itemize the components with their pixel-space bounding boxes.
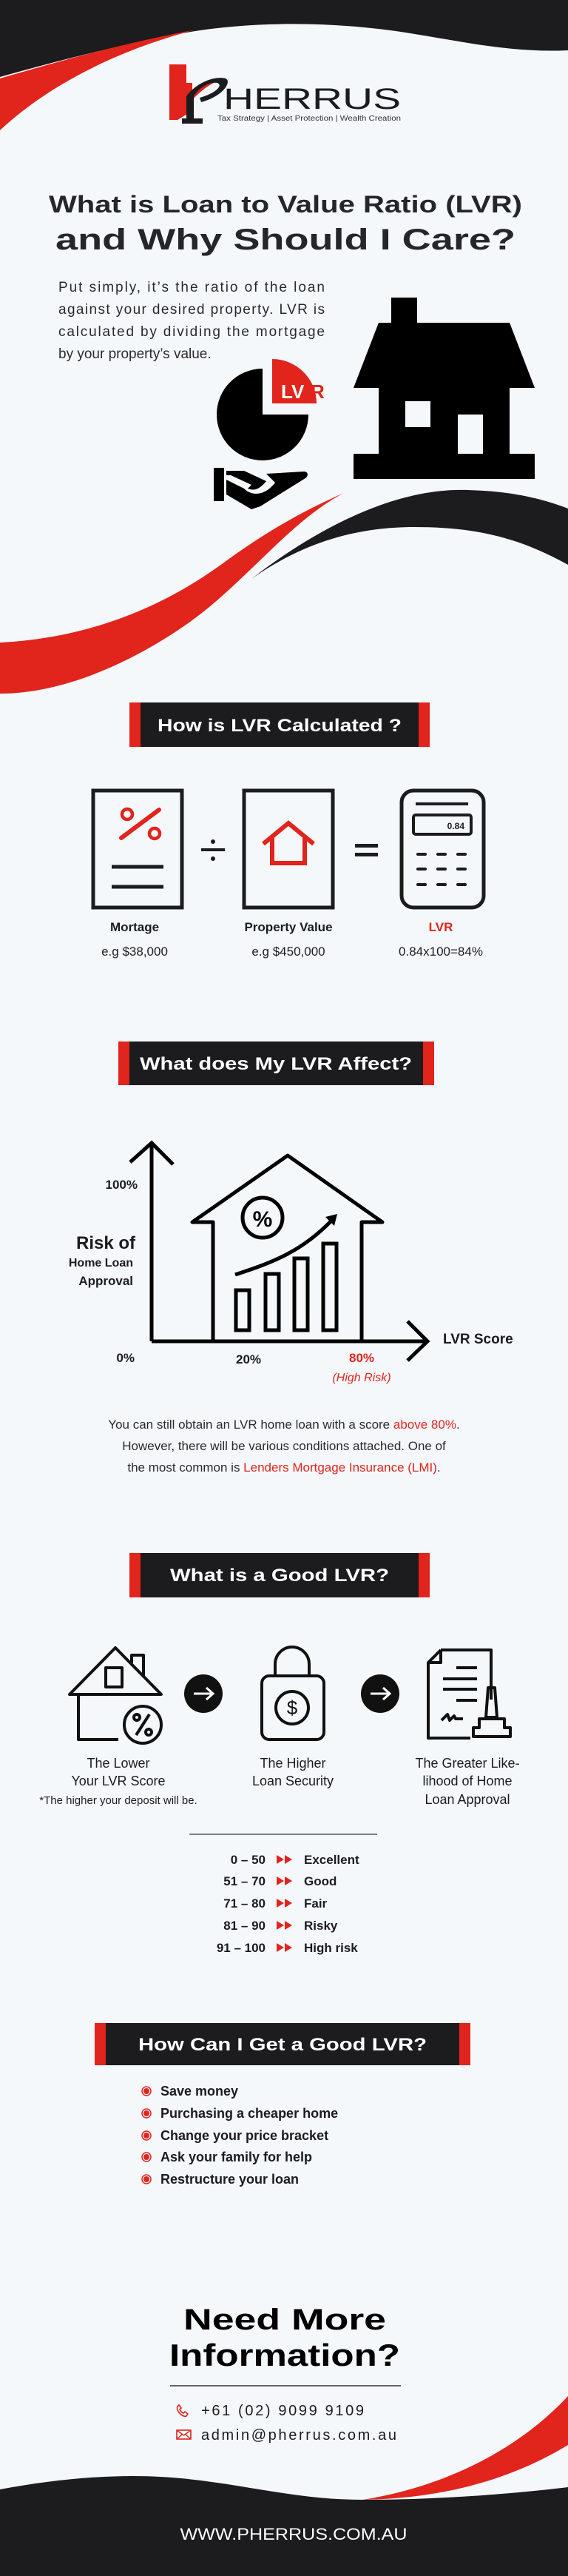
icon: document with stamp	[428, 1650, 510, 1738]
LMI paragraph: However, there will be various conditions attached. One of	[122, 1439, 446, 1453]
calc: property icon	[244, 791, 333, 908]
intro paragraph: calculated by dividing the mortgage	[58, 324, 325, 340]
LVR rating scale: Risky	[304, 1919, 338, 1933]
LVR rating scale: 81 – 90	[223, 1919, 266, 1933]
logo: HERRUS	[223, 83, 401, 115]
divide sign	[201, 839, 225, 861]
arrow 1	[184, 1674, 223, 1713]
arrow 2	[361, 1674, 399, 1713]
footer url: WWW.PHERRUS.COM.AU	[180, 2525, 407, 2543]
logo: Tax Strategy | Asset Protection | Wealth Creation	[217, 115, 401, 123]
calculator icon: 0.84	[447, 821, 464, 831]
calc labels	[101, 920, 483, 959]
good LVR captions: Your LVR Score	[71, 1774, 166, 1788]
LVR rating scale: 91 – 100	[217, 1941, 266, 1955]
calc labels: LVR	[429, 920, 453, 934]
chart: risk vs LVR: 20%	[236, 1352, 261, 1366]
header: What is a Good LVR: What is a Good LVR?	[170, 1566, 389, 1586]
good LVR captions: Loan Approval	[425, 1792, 510, 1807]
calc labels: Mortage	[110, 920, 159, 934]
contact details: +61 (02) 9099 9109	[201, 2403, 364, 2419]
hero bottom wave red	[0, 493, 344, 694]
calc labels: e.g $38,000	[101, 945, 168, 959]
intro paragraph: against your desired property. LVR is	[58, 302, 325, 318]
icon: LVR pie and hand: R	[311, 380, 325, 403]
title: What is Loan to Value Ratio (LVR)	[49, 191, 522, 218]
title	[49, 191, 522, 256]
need more information: Need More	[183, 2304, 386, 2336]
icon: LVR pie and hand	[214, 359, 325, 509]
good LVR captions: The Higher	[260, 1756, 326, 1771]
tips list: Save money	[160, 2084, 238, 2099]
top wave black	[0, 0, 568, 77]
calculator icon	[402, 791, 484, 908]
tips list: Ask your family for help	[160, 2150, 312, 2164]
good LVR captions	[39, 1756, 520, 1807]
calc labels: e.g $450,000	[251, 945, 325, 959]
header: What does My LVR Affect	[118, 1042, 434, 1085]
header: How Can I Get a Good LVR	[95, 2023, 470, 2065]
good LVR captions: Loan Security	[252, 1774, 334, 1788]
good LVR captions: The Greater Like-	[415, 1756, 520, 1771]
equals sign	[355, 844, 378, 856]
icon: house with percent	[70, 1648, 161, 1743]
LVR rating scale: 51 – 70	[223, 1874, 266, 1888]
chart: risk vs LVR: 80%	[349, 1351, 374, 1365]
icon: LVR pie and hand: LV	[281, 380, 305, 403]
LVR rating scale: High risk	[304, 1941, 358, 1955]
chart: risk vs LVR: Approval	[78, 1274, 133, 1288]
LMI paragraph: You can still obtain an LVR home loan with a score above 80%.	[108, 1418, 460, 1432]
contact details	[177, 2403, 396, 2443]
LVR rating scale: Excellent	[304, 1853, 359, 1867]
header: What does My LVR Affect: What does My LVR Affect?	[140, 1054, 412, 1074]
LMI paragraph	[108, 1418, 460, 1475]
chart: risk vs LVR: 0%	[116, 1351, 135, 1365]
calc labels: 0.84x100=84%	[399, 945, 483, 959]
contact details: admin@pherrus.com.au	[201, 2427, 396, 2443]
good LVR captions: *The higher your deposit will be.	[39, 1794, 197, 1807]
LVR rating scale	[217, 1853, 359, 1955]
tips list	[142, 2084, 338, 2187]
chart: risk vs LVR: LVR Score	[443, 1332, 513, 1347]
icon: house	[354, 298, 535, 479]
chart: risk vs LVR	[69, 1143, 513, 1384]
tips list: Change your price bracket	[160, 2128, 328, 2143]
intro paragraph: by your property’s value.	[58, 346, 212, 362]
intro paragraph	[58, 280, 325, 362]
LVR rating scale: 0 – 50	[231, 1853, 266, 1867]
calc labels: Property Value	[244, 920, 333, 934]
header: How Can I Get a Good LVR: How Can I Get a Good LVR?	[138, 2035, 427, 2055]
intro paragraph: Put simply, it’s the ratio of the loan	[58, 280, 325, 295]
LVR rating scale: Fair	[304, 1896, 328, 1911]
good LVR captions: lihood of Home	[422, 1774, 513, 1788]
hero bottom wave black	[251, 490, 568, 579]
chart: risk vs LVR: 100%	[106, 1178, 138, 1192]
header: What is a Good LVR	[129, 1553, 430, 1597]
title: and Why Should I Care?	[55, 224, 515, 256]
icon: lock with dollar	[262, 1647, 324, 1740]
good LVR captions: The Lower	[87, 1756, 150, 1771]
chart: risk vs LVR: Home Loan	[69, 1257, 133, 1269]
chart: risk vs LVR: %	[253, 1207, 272, 1232]
calc: mortgage icon	[93, 791, 182, 908]
need more information: Information?	[169, 2338, 400, 2372]
LVR rating scale: 71 – 80	[223, 1896, 266, 1911]
header: How is LVR Calculated	[129, 702, 430, 747]
tips list: Purchasing a cheaper home	[160, 2106, 338, 2121]
LMI paragraph: the most common is Lenders Mortgage Insurance (LMI).	[127, 1460, 441, 1475]
chart: risk vs LVR: Risk of	[76, 1233, 136, 1253]
footer wave red	[362, 2396, 568, 2500]
tips list: Restructure your loan	[160, 2172, 299, 2187]
chart: risk vs LVR: (High Risk)	[332, 1372, 391, 1384]
footer wave black	[0, 2476, 568, 2576]
icon: lock with dollar: $	[287, 1697, 298, 1719]
header: How is LVR Calculated: How is LVR Calculated ?	[158, 716, 402, 736]
logo	[169, 64, 401, 124]
top wave red	[0, 30, 196, 130]
need more information	[169, 2304, 400, 2372]
LVR rating scale: Good	[304, 1874, 337, 1888]
